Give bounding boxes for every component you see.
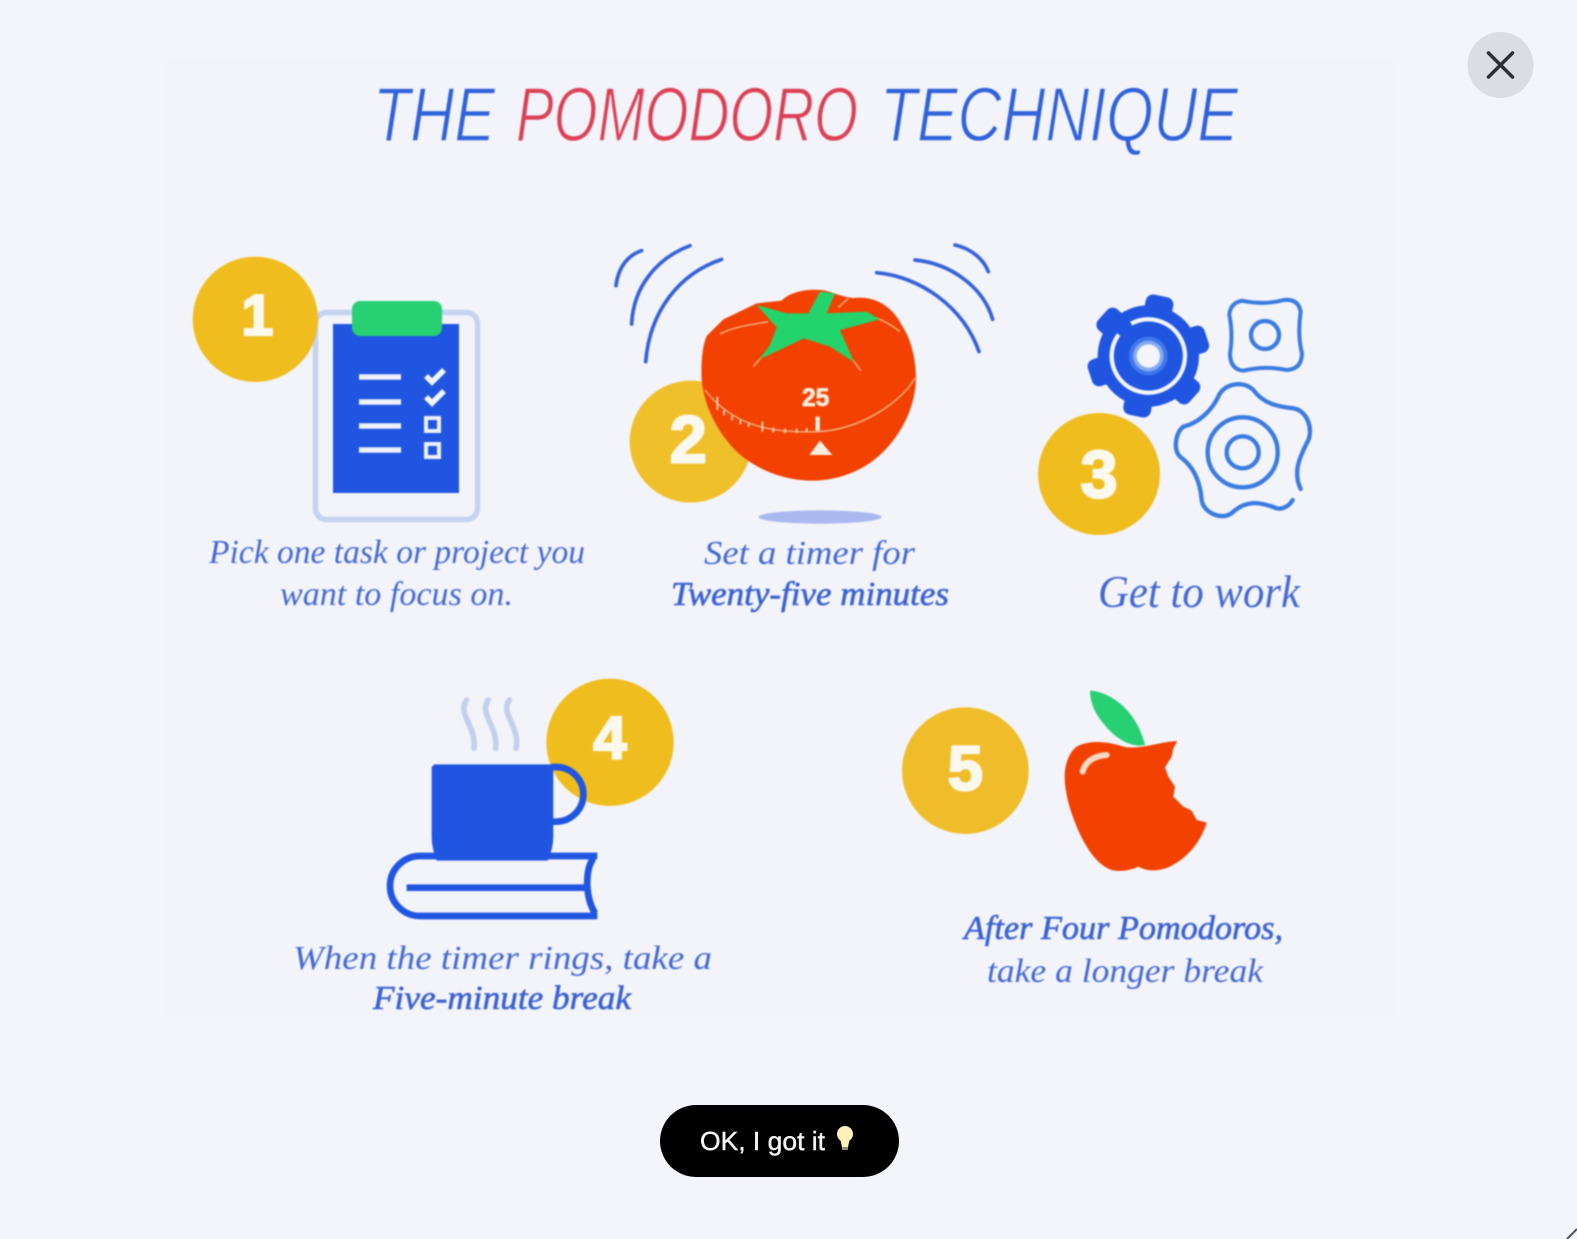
- leaf: [1090, 691, 1145, 746]
- caption: step 2: Twenty-five minutes: [671, 576, 949, 613]
- cup handle: [552, 767, 583, 822]
- step 2: set the timer: [616, 245, 993, 613]
- small outline gear: [1229, 300, 1302, 371]
- book: [390, 856, 597, 916]
- badge: number 5: [902, 707, 1029, 834]
- caption: step 1: want to focus on.: [280, 576, 513, 613]
- title: POMODORO: [516, 72, 858, 158]
- tomato leaves: [757, 292, 879, 362]
- step 5: longer break: [902, 691, 1283, 990]
- caption: step 2: [671, 535, 949, 613]
- caption: step 1: [208, 534, 585, 613]
- badge: number 2: 2: [670, 404, 707, 478]
- badge: number 2: [630, 381, 752, 503]
- caption: step 1: Pick one task or project you: [208, 534, 585, 571]
- icon: clipboard: [316, 301, 478, 520]
- caption: step 4: [293, 940, 712, 1017]
- step 4: short break: [293, 679, 712, 1017]
- large outline gear: [1176, 384, 1310, 516]
- title: THE: [373, 72, 496, 158]
- dial ticks: [717, 397, 807, 433]
- caption: step 2: Set a timer for: [704, 535, 916, 572]
- apple highlight: [1083, 755, 1107, 772]
- icon: gears: [1038, 293, 1310, 535]
- caption: step 4: When the timer rings, take a: [293, 940, 712, 977]
- badge: number 1: [193, 257, 318, 382]
- badge: number 4: [546, 679, 674, 806]
- button: OK, I got it: OK, I got it: [700, 1126, 826, 1156]
- icon: bitten apple: [902, 691, 1207, 871]
- caption: step 3: Get to work: [1098, 567, 1301, 617]
- panel: infographic image: [163, 58, 1397, 1018]
- caption: step 5: [962, 910, 1283, 990]
- caption: step 5: After Four Pomodoros,: [962, 910, 1283, 947]
- title: [373, 72, 1239, 158]
- cup: [432, 764, 553, 861]
- button: OK, I got it: [660, 1105, 899, 1177]
- dial number 25: 25: [802, 385, 830, 412]
- step 1: pick a task: [193, 257, 585, 613]
- badge: number 4: 4: [593, 704, 627, 771]
- shadow: [758, 510, 882, 524]
- badge: number 1: 1: [241, 284, 273, 348]
- badge: number 3: 3: [1080, 439, 1118, 513]
- icon: light bulb: [837, 1126, 853, 1150]
- solid gear: [1086, 293, 1211, 419]
- badge: number 5: 5: [948, 734, 983, 804]
- icon: coffee cup on book: [390, 679, 674, 916]
- tomato body: [701, 290, 916, 481]
- steam: [464, 700, 517, 748]
- close button: [1468, 32, 1534, 98]
- caption: step 5: take a longer break: [987, 953, 1264, 990]
- vibration lines: [616, 245, 993, 362]
- caption: step 4: Five-minute break: [372, 980, 632, 1017]
- step 3: get to work: [1038, 293, 1310, 617]
- apple body: [1065, 741, 1207, 871]
- badge: number 3: [1038, 413, 1160, 535]
- title: TECHNIQUE: [880, 72, 1239, 158]
- resize handle: [1567, 1229, 1577, 1239]
- icon: tomato timer: [616, 245, 993, 524]
